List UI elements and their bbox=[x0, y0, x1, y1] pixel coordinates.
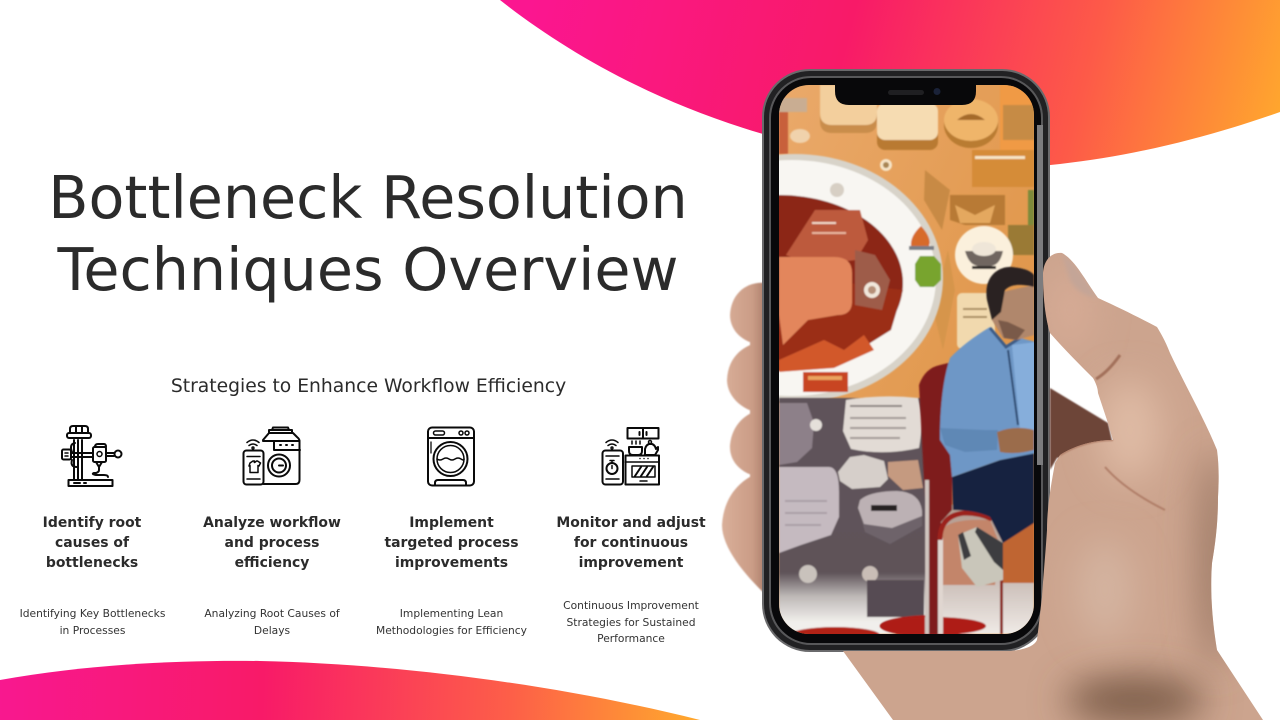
step 4 description: Continuous Improvement bbox=[563, 599, 699, 612]
screen: white plate bbox=[779, 153, 944, 402]
step 2 description bbox=[204, 607, 340, 637]
step 2 description: Delays bbox=[254, 624, 291, 637]
step 2 heading: and process bbox=[225, 535, 319, 551]
phone notch bbox=[835, 85, 976, 105]
step 3 heading: Implement bbox=[409, 515, 494, 531]
phone body bbox=[762, 69, 1050, 652]
top gradient swoosh bbox=[500, 0, 1280, 168]
title bbox=[48, 164, 688, 304]
hand holding phone bbox=[721, 69, 1263, 720]
step 3 description: Methodologies for Efficiency bbox=[376, 624, 527, 637]
step 1 heading bbox=[43, 515, 142, 571]
step 4 heading: for continuous bbox=[574, 535, 688, 551]
step 4 heading: Monitor and adjust bbox=[556, 515, 706, 531]
phone screen bbox=[779, 85, 1034, 634]
step 3 heading bbox=[384, 515, 519, 571]
bottom gradient swoosh bbox=[0, 661, 700, 720]
step 3 description: Implementing Lean bbox=[400, 607, 503, 620]
icon: smart kitchen with stopwatch bbox=[602, 428, 659, 484]
hand: thumb and palm over phone bbox=[830, 240, 1280, 720]
step 4 description: Strategies for Sustained bbox=[566, 616, 696, 629]
subtitle: Strategies to Enhance Workflow Efficiency bbox=[171, 376, 566, 397]
title: Bottleneck Resolution bbox=[48, 164, 688, 232]
step 4 description bbox=[563, 599, 699, 645]
icon: smart washing machine with phone bbox=[244, 428, 300, 484]
step 3 description bbox=[376, 607, 527, 637]
hand: four fingers behind phone bbox=[722, 283, 766, 595]
step 4 description: Performance bbox=[597, 632, 665, 645]
step 2 description: Analyzing Root Causes of bbox=[204, 607, 340, 620]
step 2 heading bbox=[203, 515, 341, 571]
step 4 heading bbox=[556, 515, 706, 571]
step 1 description: in Processes bbox=[60, 624, 126, 637]
phone speaker and camera bbox=[888, 88, 940, 95]
step 2 heading: Analyze workflow bbox=[203, 515, 341, 531]
screen: infographic cards bbox=[779, 85, 1034, 350]
step 1 description bbox=[20, 607, 166, 637]
hand: finger shadow behind thumb bbox=[1050, 388, 1113, 470]
step 1 description: Identifying Key Bottlenecks bbox=[20, 607, 166, 620]
screen: lower grey section bbox=[779, 396, 986, 643]
icon: washing machine bbox=[428, 428, 474, 486]
title: Techniques Overview bbox=[56, 236, 679, 304]
step 3 heading: targeted process bbox=[384, 535, 519, 551]
step 1 heading: causes of bbox=[55, 535, 130, 551]
icon: drill press machine bbox=[62, 426, 122, 486]
step 1 heading: bottlenecks bbox=[46, 555, 138, 571]
step 1 heading: Identify root bbox=[43, 515, 142, 531]
step 2 heading: efficiency bbox=[235, 555, 309, 571]
screen: man in chair bbox=[880, 267, 1036, 635]
step 3 heading: improvements bbox=[395, 555, 508, 571]
step 4 heading: improvement bbox=[579, 555, 684, 571]
